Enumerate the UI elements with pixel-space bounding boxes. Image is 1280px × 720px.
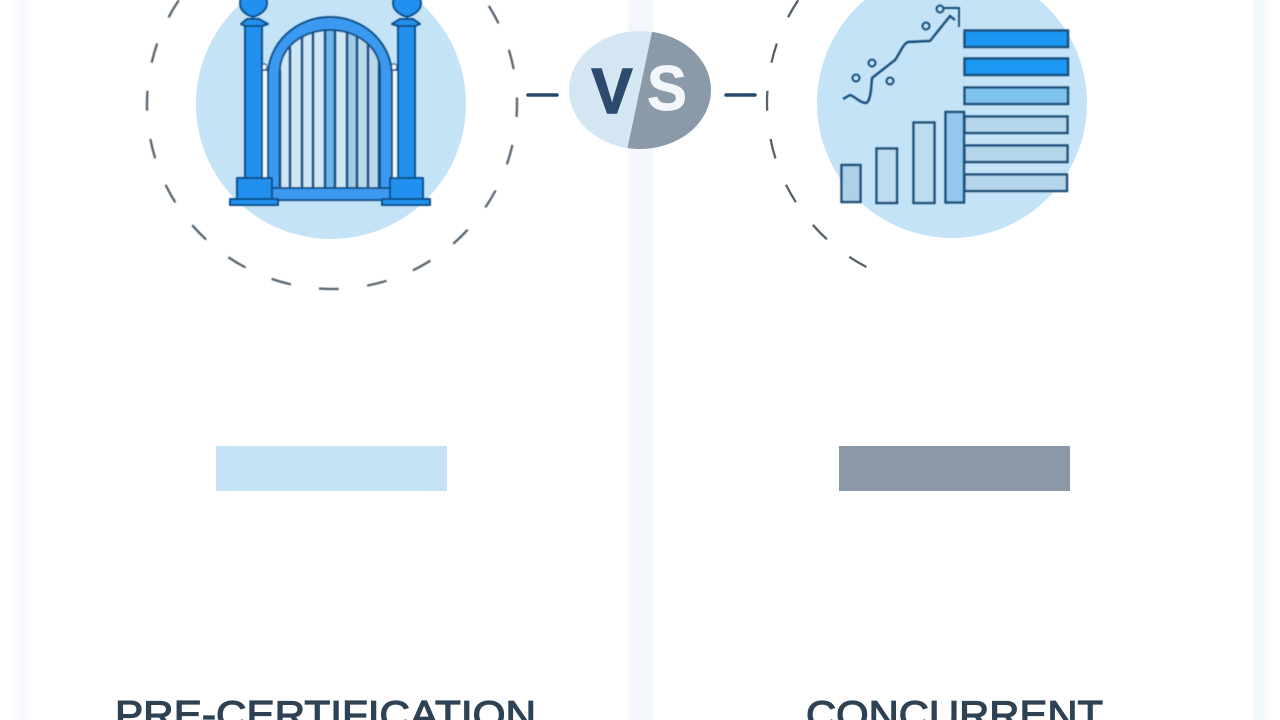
connector: right dash [726,93,755,97]
icon: gate [230,0,430,205]
connector: left dash [528,93,557,97]
dashed ring: concurrent [766,0,867,268]
trend line [843,6,959,103]
panel: pre-certification [118,0,534,720]
vs letter S: S [647,54,687,124]
panel: concurrent [766,0,1103,720]
icon backdrop: light blue circle [817,0,1087,238]
icon backdrop: light blue circle [196,0,466,239]
left pillar [230,0,278,205]
right pillar [382,0,430,205]
label bar: concurrent [839,446,1070,491]
vertical bars [842,112,964,203]
label bar: pre-certification [216,446,447,491]
vs letter V: V [592,55,633,127]
horizontal bars [964,30,1068,191]
vs badge [528,25,755,155]
icon: charts [842,6,1068,203]
dashed ring: pre-certification [147,0,517,289]
